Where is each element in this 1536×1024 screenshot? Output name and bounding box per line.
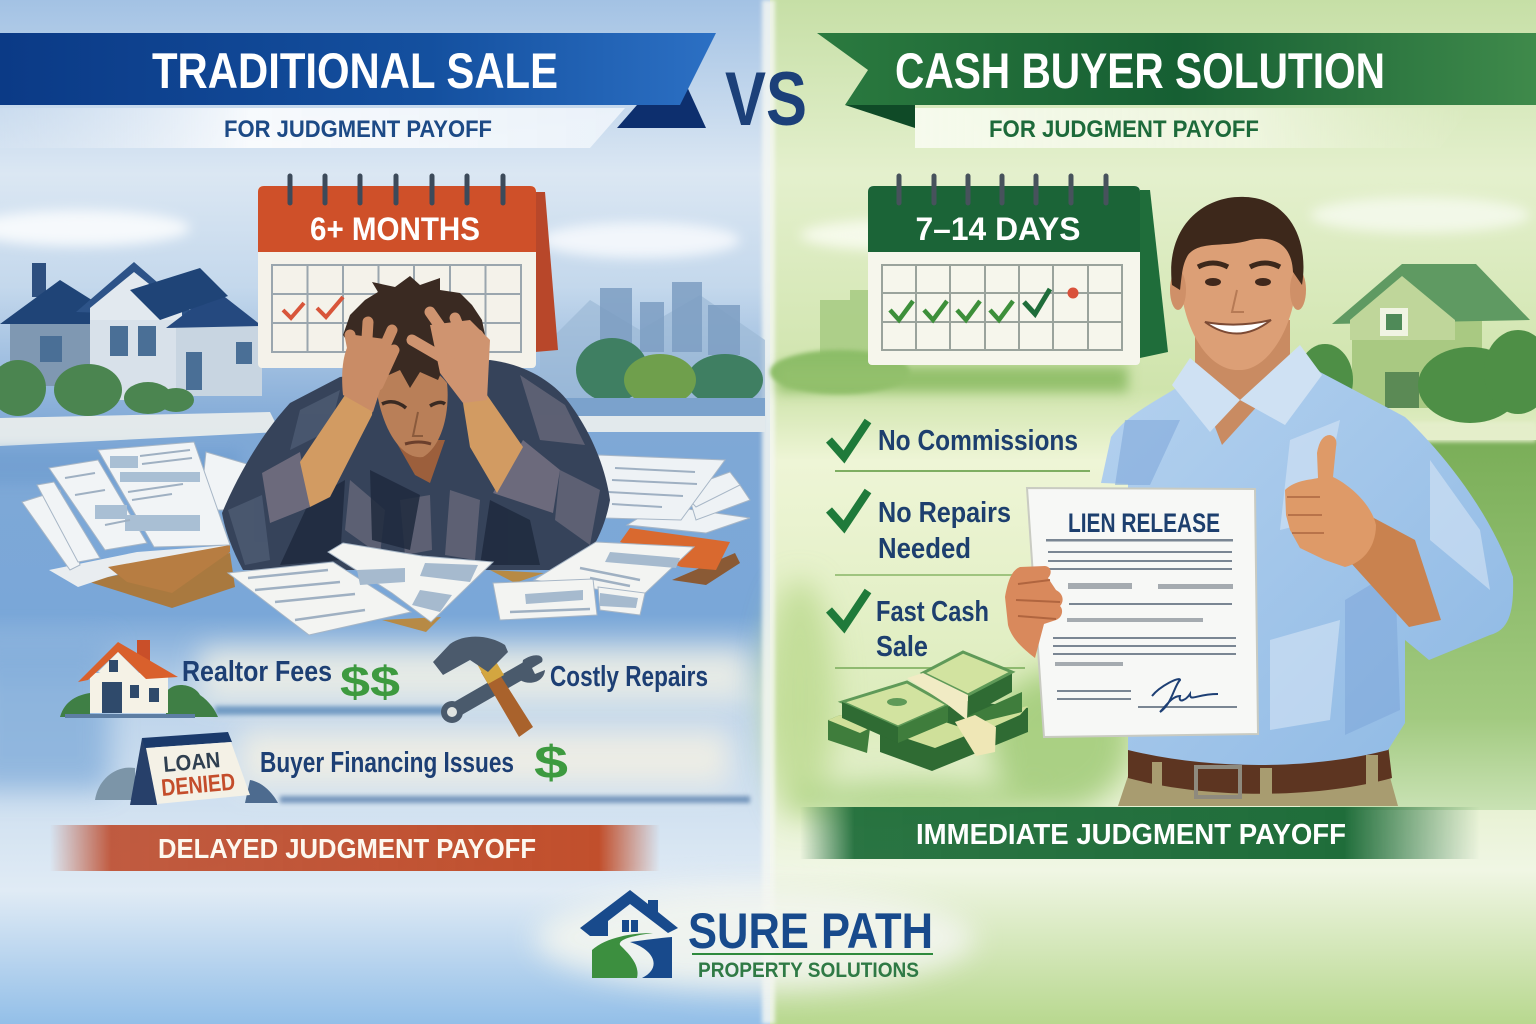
benefit: no repairs needed [829, 491, 1025, 576]
benefit: no commissions [829, 421, 1090, 472]
calendar: 6+ months [258, 176, 558, 368]
paper pile: right stack and folders [598, 455, 750, 585]
calendar: 7-14 days: 7–14 DAYS [916, 211, 1080, 247]
icon: house and winding road [580, 890, 678, 978]
benefit: no commissions: No Commissions [878, 425, 1078, 457]
benefit: fast cash sale: Sale [876, 631, 928, 663]
result bar: immediate judgment payoff [800, 807, 1480, 859]
neck and collar [1195, 320, 1290, 445]
arm and thumbs up hand [1285, 435, 1441, 627]
benefit: no repairs needed: Needed [878, 533, 971, 565]
cost: realtor fees: Realtor Fees [182, 656, 332, 688]
left scenery: clouds, skyline, trees and houses [0, 210, 765, 484]
right scenery: trees, lawn and house [770, 197, 1536, 810]
result bar: delayed judgment payoff [50, 825, 660, 871]
cost: costly repairs: Costly Repairs [550, 661, 708, 693]
icon: left houses [0, 262, 262, 416]
centre divider [762, 0, 775, 1024]
icon: green house [1332, 264, 1530, 408]
subheading: traditional sale: FOR JUDGMENT PAYOFF [224, 116, 492, 143]
icon: cash stacks [828, 652, 1028, 771]
cost: buyer financing issues: Buyer Financing Issues [260, 747, 514, 779]
VS label: VS [725, 57, 807, 142]
document: lien release: LIEN RELEASE [1068, 508, 1220, 538]
calendar: 6+ months: 6+ MONTHS [310, 211, 480, 247]
paper pile: front centre [228, 542, 694, 635]
logo: sure path property solutions [580, 890, 933, 982]
hair [343, 276, 486, 388]
subheading: cash buyer [915, 108, 1470, 148]
face [375, 365, 448, 457]
trousers and belt [1118, 770, 1398, 806]
calendar: 7-14 days [868, 176, 1168, 365]
hair [1171, 197, 1303, 290]
heading banner: cash buyer: CASH BUYER SOLUTION [895, 43, 1385, 99]
icon: loan denied sign: DENIED [160, 769, 236, 802]
hand holding document [1005, 566, 1063, 658]
paper pile: left stack and folders [22, 442, 257, 608]
cost: costly repairs [433, 637, 708, 737]
figure: stressed man [222, 276, 610, 570]
icon: hammer and wrench [433, 637, 545, 737]
cost: realtor fees: $$ [340, 658, 400, 707]
logo: sure path property solutions: SURE PATH [688, 903, 933, 959]
forearms and hands [300, 312, 523, 507]
icon: loan denied sign: LOAN [162, 747, 221, 777]
benefit: fast cash sale: Fast Cash [876, 596, 989, 628]
cost area wash: left [0, 640, 750, 803]
subheading: traditional sale [0, 108, 625, 148]
result bar: delayed judgment payoff: DELAYED JUDGMENT PAYOFF [158, 833, 536, 864]
heading banner: cash buyer [817, 33, 1536, 128]
result bar: immediate judgment payoff: IMMEDIATE JUDGMENT PAYOFF [916, 819, 1346, 851]
cost: buyer financing issues: $ [534, 736, 568, 788]
benefit: fast cash sale [829, 591, 1025, 669]
logo glow backdrop [535, 886, 975, 990]
icon: loan denied sign [130, 732, 250, 805]
heading banner: traditional sale [0, 33, 716, 128]
document: lien release [1027, 488, 1258, 737]
cost: buyer financing issues [95, 732, 568, 805]
subheading: cash buyer: FOR JUDGMENT PAYOFF [989, 116, 1259, 143]
shirt [1101, 350, 1513, 765]
panel background: cash buyer [770, 0, 1536, 1024]
cost: realtor fees [60, 640, 400, 718]
face features [1198, 263, 1280, 334]
benefits area wash: right [765, 580, 1130, 820]
sleeve cuffs [262, 440, 560, 523]
panel background: traditional sale [0, 0, 770, 1024]
head [1180, 231, 1296, 370]
figure: smiling man [1005, 197, 1513, 806]
icon: small house [60, 640, 218, 718]
heading banner: traditional sale: TRADITIONAL SALE [152, 43, 558, 99]
neck [395, 440, 445, 483]
shirt [222, 360, 610, 570]
benefit: no repairs needed: No Repairs [878, 497, 1011, 529]
logo: sure path property solutions: PROPERTY SOLUTIONS [698, 959, 919, 982]
